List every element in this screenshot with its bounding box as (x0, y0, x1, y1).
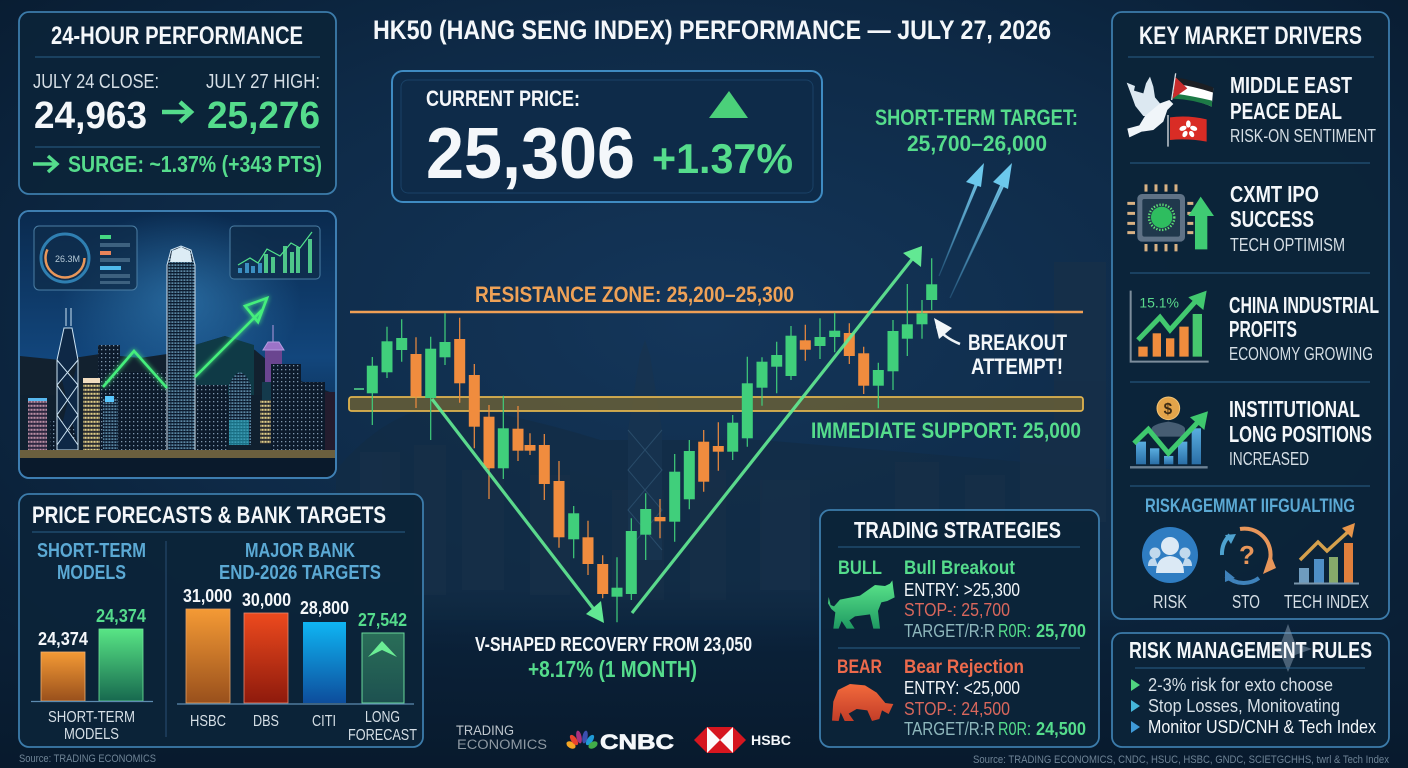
surge callout: SURGE: ~1.37% (+343 PTS) (68, 151, 322, 177)
driver: China industrial profits (1131, 291, 1379, 364)
subheading: major bank targets: END-2026 TARGETS (219, 562, 381, 584)
strategy: bull breakout (828, 558, 1086, 641)
driver: CXMT IPO: SUCCESS (1230, 206, 1314, 232)
driver: Middle East peace deal: PEACE DEAL (1230, 98, 1342, 124)
strategy: bull breakout: R0R: (998, 621, 1031, 641)
strategy: bear rejection: ENTRY: <25,000 (904, 678, 1020, 698)
driver: CXMT IPO: TECH OPTIMISM (1230, 235, 1345, 255)
panel: Hong Kong skyline illustration (19, 210, 340, 478)
arrow: V-shape recovery (632, 246, 922, 613)
dashboard card: mini chart (230, 226, 320, 279)
subheading: short-term models: SHORT-TERM (37, 540, 146, 562)
subheading: short-term models (37, 540, 146, 584)
driver: Middle East peace deal: MIDDLE EAST (1230, 72, 1352, 98)
bar chart: bank targets: 30,000 (242, 590, 291, 610)
strategy: bull breakout: STOP-: 25,700 (904, 600, 1010, 620)
strategy: bull breakout: ENTRY: >25,300 (904, 580, 1020, 600)
panel: risk management rules (1112, 624, 1389, 747)
icon: sto cycle (1222, 529, 1276, 612)
July 24 close: JULY 24 CLOSE: (33, 71, 159, 93)
July 27 high (206, 71, 320, 137)
strategy: bull breakout: Bull Breakout (904, 558, 1016, 579)
support band (349, 397, 1083, 411)
strategy: bear rejection: STOP-: 24,500 (904, 699, 1010, 719)
subheading: garbled risk label: RISKAGEMMAT IIFGUALTING (1145, 496, 1355, 517)
short-term target label: SHORT-TERM TARGET: (875, 105, 1078, 130)
bar chart: bank targets: LONG (365, 709, 400, 726)
arrow: target projection two (950, 163, 1012, 298)
bar chart: bank targets: 31,000 (183, 586, 232, 606)
bar chart: short-term models: MODELS (64, 726, 119, 743)
subheading: short-term models: MODELS (57, 562, 126, 584)
arrow: rising green trend (103, 298, 267, 388)
V-shaped recovery label (475, 634, 752, 682)
rule one: 2-3% risk for exto choose (1148, 675, 1333, 695)
callout: breakout attempt: ATTEMPT! (971, 354, 1063, 379)
strategy: bear rejection: TARGET/R:R (904, 719, 995, 739)
driver: CXMT IPO: CXMT IPO (1230, 181, 1319, 207)
bar chart: bank targets: DBS (253, 713, 279, 730)
July 27 high: 25,276 (207, 95, 320, 137)
percent change: +1.37% (652, 135, 793, 182)
building: Bank of China tower (57, 308, 78, 450)
panel: current price (392, 71, 822, 202)
driver: institutional long positions (1130, 396, 1372, 469)
bar chart: bank targets (177, 586, 417, 744)
panel: key market drivers (1112, 12, 1389, 619)
July 27 high: JULY 27 HIGH: (206, 71, 320, 93)
resistance zone: RESISTANCE ZONE: 25,200–25,300 (475, 282, 794, 307)
heading: trading strategies: TRADING STRATEGIES (854, 517, 1061, 543)
icon: bear (832, 684, 893, 721)
candlestick chart (354, 258, 937, 622)
immediate support label: IMMEDIATE SUPPORT: 25,000 (811, 418, 1081, 443)
icon: risk people (1142, 527, 1198, 612)
driver: China industrial profits: PROFITS (1229, 316, 1297, 342)
bar chart: short-term models: 24,374 (96, 606, 146, 626)
callout: breakout attempt (934, 318, 1067, 379)
bar chart: short-term models: 24,374 (38, 629, 88, 649)
arrow: close to high (162, 102, 191, 122)
subheading: major bank targets (219, 540, 381, 584)
icon: dove and flags (1127, 73, 1213, 147)
strategy: bear rejection (832, 657, 1086, 739)
arrow: target projection one (939, 163, 984, 276)
strategy: bear rejection: Bear Rejection (904, 657, 1024, 678)
icon: profits chart: 15.1% (1139, 294, 1179, 310)
panel: trading strategies (820, 510, 1099, 747)
logo: Trading Economics (456, 723, 547, 752)
icon: chip with up arrow (1127, 184, 1214, 251)
icon: institutional investor (1130, 397, 1208, 467)
strategy: bull breakout: 25,700 (1036, 621, 1086, 641)
bar chart: bank targets: 28,800 (300, 598, 349, 618)
logo: CNBC: CNBC (600, 731, 674, 754)
bar chart: bank targets: FORECAST (348, 727, 417, 744)
icon: risk people: RISK (1153, 592, 1187, 612)
title: HK50 (HANG SENG INDEX) PERFORMANCE — JULY 27, 2026 (373, 15, 1051, 45)
icon: profits chart (1131, 291, 1209, 362)
heading: price forecasts: PRICE FORECASTS & BANK TARGETS (32, 502, 386, 529)
icon: sto cycle: ? (1239, 540, 1255, 570)
current price label: CURRENT PRICE: (426, 86, 580, 111)
dashboard card: donut and bars: 26.3M (55, 254, 80, 264)
strategy: bear rejection: 24,500 (1036, 719, 1086, 739)
V-shaped recovery label: V-SHAPED RECOVERY FROM 23,050 (475, 634, 752, 656)
arrow: V-shape decline (432, 399, 604, 623)
icon: up triangle (709, 91, 748, 118)
building: International Finance Centre tower (167, 246, 195, 452)
heading: 24-hour performance: 24-HOUR PERFORMANCE (51, 22, 303, 50)
July 24 close: 24,963 (34, 95, 147, 137)
bar chart: short-term models (31, 606, 153, 743)
subheading: major bank targets: MAJOR BANK (245, 540, 355, 562)
rule two: Stop Losses, Monitovating (1148, 696, 1340, 716)
rule three: Monitor USD/CNH & Tech Index (1148, 717, 1376, 737)
current price value: 25,306 (426, 114, 635, 194)
driver: CXMT IPO (1127, 181, 1345, 255)
source note left: Source: TRADING ECONOMICS (19, 753, 156, 765)
strategy: bear rejection: R0R: (998, 719, 1031, 739)
panel: price forecasts and bank targets (19, 494, 423, 747)
driver: institutional long positions: INSTITUTIONAL (1229, 396, 1360, 422)
panel: 24-hour performance (19, 12, 336, 194)
bar chart: bank targets: 27,542 (358, 610, 407, 630)
bar chart: bank targets: HSBC (190, 713, 226, 730)
short-term target label: 25,700–26,000 (907, 131, 1047, 156)
logo: HSBC (694, 727, 791, 753)
driver: institutional long positions: INCREASED (1229, 449, 1309, 469)
dashboard card: donut and bars (34, 226, 137, 290)
icon: tech index chart (1284, 523, 1369, 612)
icon group: risk, sto, tech index (1142, 523, 1369, 612)
V-shaped recovery label: +8.17% (1 MONTH) (528, 656, 697, 682)
icon: tech index chart: TECH INDEX (1284, 592, 1369, 612)
logo: HSBC: HSBC (751, 732, 791, 748)
bar chart: bank targets: CITI (312, 713, 336, 730)
driver: Middle East peace deal (1127, 72, 1376, 147)
short-term target label (875, 105, 1078, 156)
icon: sto cycle: STO (1232, 592, 1260, 612)
callout: breakout attempt: BREAKOUT (968, 330, 1067, 355)
logo: CNBC (565, 730, 674, 754)
bar chart: short-term models: SHORT-TERM (48, 709, 135, 726)
strategy: bear rejection: BEAR (837, 657, 882, 678)
strategy: bull breakout: BULL (838, 558, 882, 579)
icon: bull (828, 580, 895, 629)
icon: institutional investor: $ (1164, 401, 1173, 418)
strategy: bull breakout: TARGET/R:R (904, 621, 995, 641)
logo: Trading Economics: ECONOMICS (457, 737, 547, 752)
logo: Trading Economics: TRADING (456, 723, 514, 738)
icon: star watermark (1273, 624, 1312, 672)
July 24 close (33, 71, 159, 137)
